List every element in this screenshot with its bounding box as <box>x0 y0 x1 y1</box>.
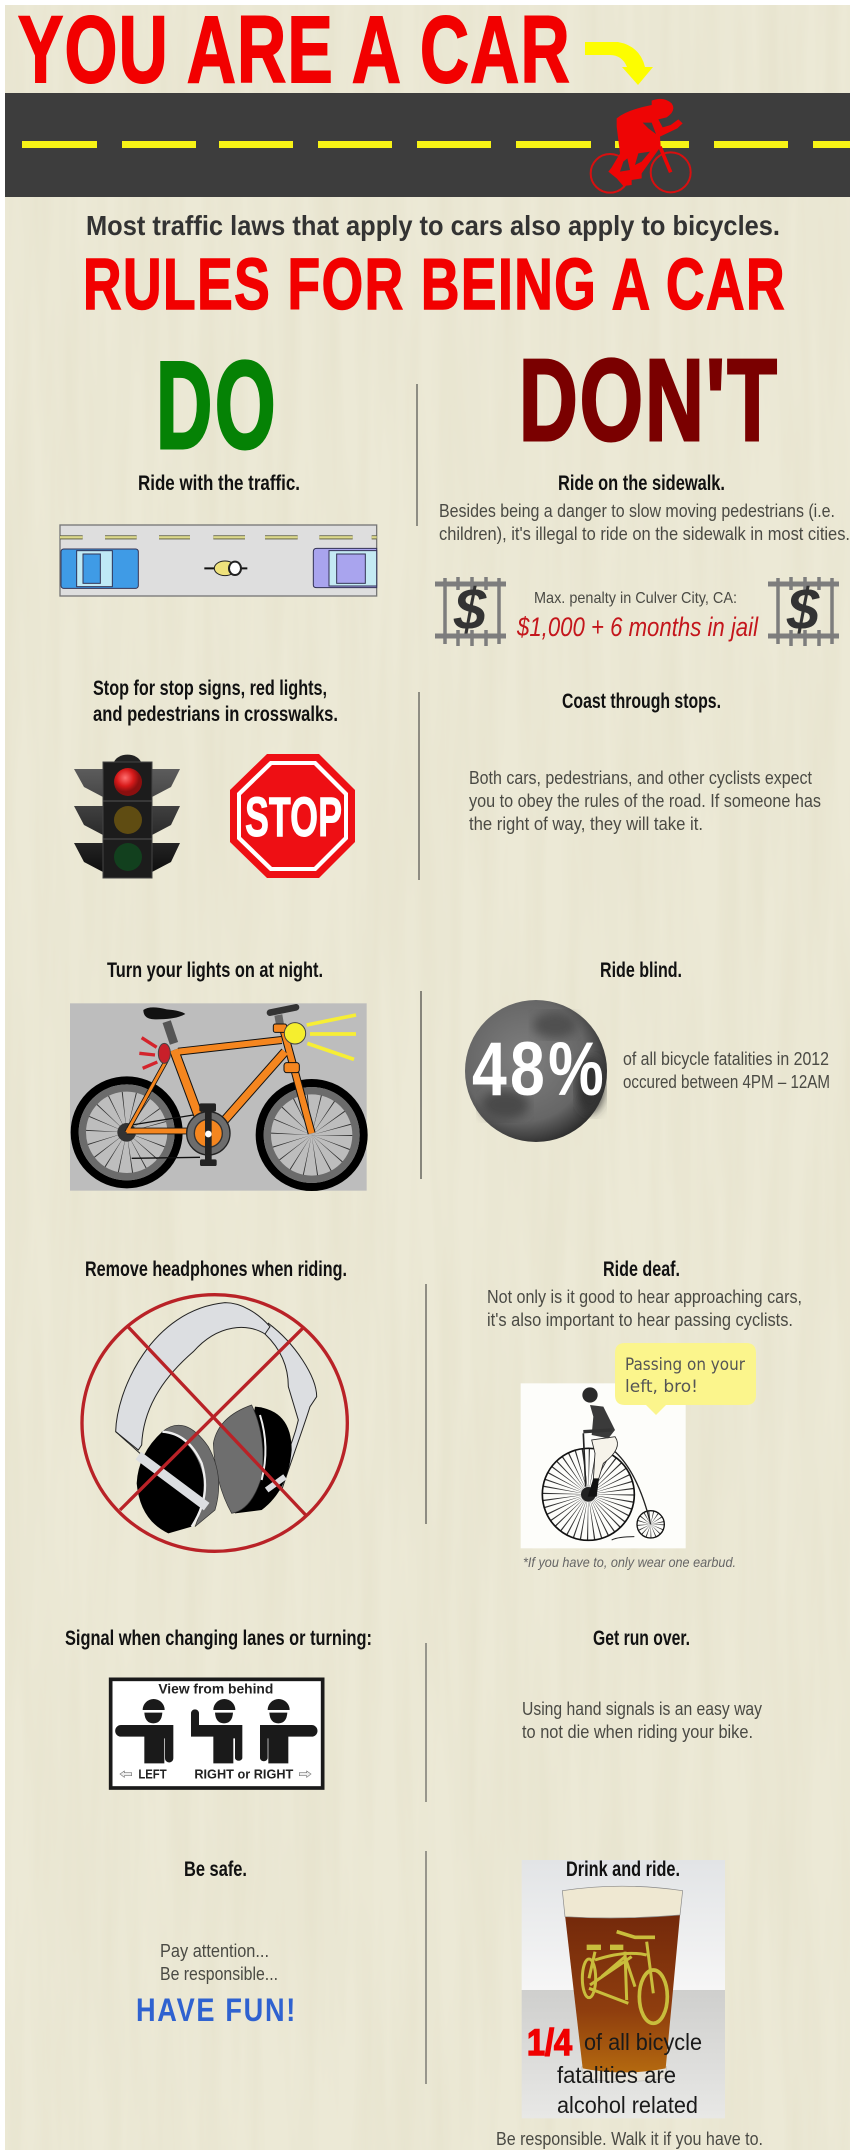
front wheel <box>260 1083 364 1187</box>
divider row 6 <box>426 1851 427 2084</box>
divider row 4 <box>426 1284 427 1524</box>
text: fatalities at night: of all bicycle fatalities in 2012 <box>623 1049 829 1069</box>
rule: stop <box>93 677 338 726</box>
text: have fun: HAVE FUN! <box>136 1992 297 2028</box>
speech bubble: left, bro! <box>625 1377 698 1397</box>
illustration: penny farthing <box>521 1383 686 1548</box>
illustration: hand signals <box>111 1679 323 1788</box>
text: penalty amount: $1,000 + 6 months in jail <box>516 612 759 642</box>
icon: jailed dollar left: $ <box>453 577 487 642</box>
figure: right signal out <box>260 1699 317 1763</box>
rule: stop: and pedestrians in crosswalks. <box>93 703 338 726</box>
rule: ride on the sidewalk: Ride on the sidewalk. <box>558 472 725 495</box>
icon: stop sign: STOP <box>245 785 342 848</box>
rule: coast through stops: Coast through stops. <box>562 690 721 713</box>
illustration: road with cars and cyclist <box>60 525 377 596</box>
rule: ride with the traffic: Ride with the traffic. <box>138 472 300 495</box>
text: pay attention <box>160 1941 278 1984</box>
rule: remove headphones: Remove headphones when riding. <box>85 1258 347 1281</box>
rule: ride blind: Ride blind. <box>600 959 682 982</box>
text: stops explanation: you to obey the rules of the road. If someone has <box>469 791 821 811</box>
speech bubble: Passing on your <box>625 1355 745 1375</box>
rule: drink and ride: Drink and ride. <box>566 1858 680 1881</box>
heading: do: DO <box>156 337 278 475</box>
text: stops explanation <box>469 768 821 834</box>
speech bubble <box>615 1343 756 1415</box>
rule: be safe: Be safe. <box>184 1858 247 1881</box>
illustration: hand signals: View from behind <box>158 1680 273 1696</box>
text: hearing explanation <box>487 1287 802 1330</box>
divider row 5 <box>426 1643 427 1802</box>
text: be responsible: Be responsible. Walk it if you have to. <box>496 2129 763 2149</box>
icon: moon with statistic <box>465 1000 607 1142</box>
text: stops explanation: Both cars, pedestrians, and other cyclists expect <box>469 768 812 788</box>
signal labels <box>120 1766 311 1781</box>
road <box>5 93 850 197</box>
frame <box>127 1024 312 1133</box>
icon: yellow curved arrow <box>585 42 653 85</box>
purple car <box>313 548 377 588</box>
small cyclist <box>204 561 247 576</box>
signal labels: LEFT <box>138 1766 167 1781</box>
text: one quarter statistic: fatalities are <box>557 2062 676 2088</box>
rule: signal: Signal when changing lanes or turning: <box>65 1627 372 1650</box>
text: pay attention: Be responsible... <box>160 1964 278 1984</box>
figure: right signal up <box>191 1699 242 1763</box>
tail light and beams <box>139 1038 170 1068</box>
blue car <box>61 549 138 588</box>
text: hearing explanation: it's also important to hear passing cyclists. <box>487 1310 793 1330</box>
subtitle: Most traffic laws that apply to cars also apply to bicycles. <box>86 210 780 241</box>
text: hand signals explanation: Using hand signals is an easy way <box>522 1699 762 1719</box>
icon: jailed dollar right <box>768 577 839 646</box>
text: pay attention: Pay attention... <box>160 1941 269 1961</box>
text: one quarter statistic: 1/4 <box>527 2022 572 2063</box>
icon: traffic light <box>74 755 180 878</box>
rule: lights: Turn your lights on at night. <box>107 959 323 982</box>
divider row 3 <box>420 991 422 1179</box>
text: hearing explanation: Not only is it good to hear approaching cars, <box>487 1287 802 1307</box>
illustration: beer glass <box>522 1860 725 2118</box>
text: one quarter statistic <box>527 2022 702 2118</box>
text: hand signals explanation <box>522 1699 762 1742</box>
icon: crossed out headphones <box>82 1295 347 1551</box>
text: sidewalk explanation <box>439 501 850 544</box>
rule: ride deaf: Ride deaf. <box>603 1258 680 1281</box>
title: YOU ARE A CAR <box>18 0 571 103</box>
headlight and beams <box>284 1015 356 1059</box>
icon: jailed dollar left <box>435 577 506 646</box>
seat and handlebar <box>143 1007 296 1043</box>
figure: left signal <box>115 1699 173 1763</box>
text: max penalty: Max. penalty in Culver City, CA: <box>534 590 737 607</box>
signal labels: RIGHT or RIGHT <box>194 1766 293 1781</box>
text: one quarter statistic: of all bicycle <box>584 2029 702 2055</box>
footnote: earbud: *If you have to, only wear one earbud. <box>523 1554 736 1570</box>
rear wheel <box>75 1080 179 1184</box>
icon: red cyclist <box>591 99 691 193</box>
icon: stop sign <box>230 754 355 878</box>
icon: moon with statistic: 48% <box>472 1027 607 1112</box>
tandem bike print <box>582 1932 667 2023</box>
chain <box>132 1115 200 1158</box>
text: hand signals explanation: to not die when riding your bike. <box>522 1722 753 1742</box>
rule: stop: Stop for stop signs, red lights, <box>93 677 327 700</box>
text: fatalities at night <box>623 1049 830 1092</box>
icon: jailed dollar right: $ <box>786 577 820 642</box>
crank <box>187 1103 230 1166</box>
rule: get run over: Get run over. <box>593 1627 690 1650</box>
text: stops explanation: the right of way, they will take it. <box>469 814 703 834</box>
divider row 2 <box>418 692 420 880</box>
divider row 1 <box>416 384 418 526</box>
illustration: bicycle with lights <box>70 1003 367 1191</box>
text: one quarter statistic: alcohol related <box>557 2092 698 2118</box>
